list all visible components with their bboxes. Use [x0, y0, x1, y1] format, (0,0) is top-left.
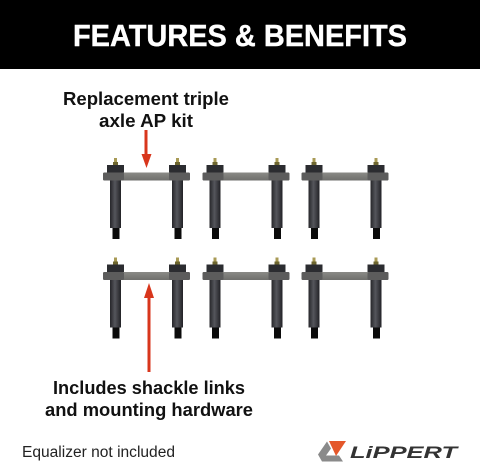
- callout: replacement kit second line: axle AP kit: [99, 111, 193, 131]
- arrow: pointing down to kit: [142, 130, 152, 168]
- logo mark: [318, 441, 346, 462]
- title: FEATURES & BENEFITS: [73, 19, 407, 53]
- bottom row of shackle kits: [103, 258, 388, 338]
- callout: includes hardware second line: and mounting hardware: [45, 400, 253, 420]
- top row of shackle kits: [103, 158, 388, 239]
- footnote: Equalizer not included: [22, 444, 175, 461]
- title banner: [0, 0, 480, 69]
- logo wordmark: LiPPERT: [350, 443, 459, 462]
- Lippert logo: [318, 441, 459, 462]
- callout: replacement kit: Replacement triple: [63, 89, 229, 109]
- callout: includes hardware: Includes shackle links: [53, 378, 245, 398]
- arrow: pointing up to shackle link: [144, 283, 154, 372]
